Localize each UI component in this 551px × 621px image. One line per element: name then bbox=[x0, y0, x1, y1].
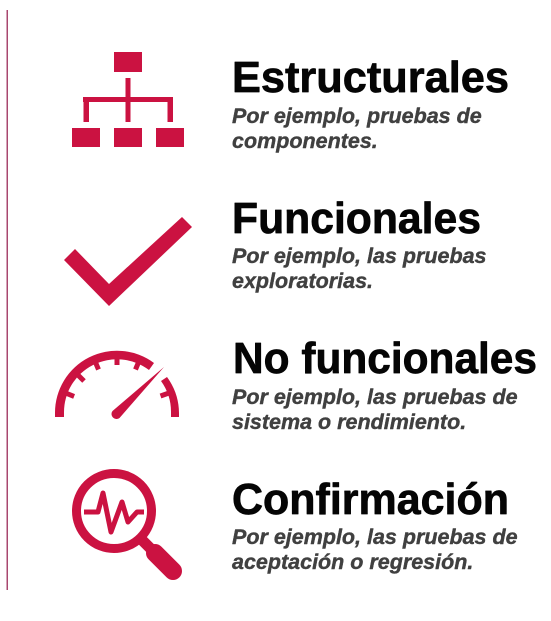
text: Funcionales example: exploratorias. bbox=[232, 269, 373, 293]
text: No funcionales example: Por ejemplo, las pruebas de bbox=[232, 385, 518, 409]
heading: Estructurales: Estructurales bbox=[232, 54, 509, 102]
vertical rule bbox=[6, 10, 8, 590]
heading: Funcionales: Funcionales bbox=[232, 195, 481, 243]
icon: magnifier with pulse bbox=[76, 474, 173, 571]
heading: No funcionales: No funcionales bbox=[233, 335, 537, 383]
text: Funcionales example: Por ejemplo, las pruebas bbox=[232, 244, 487, 268]
heading: Confirmación: Confirmación bbox=[232, 476, 509, 524]
text: No funcionales example: sistema o rendimiento. bbox=[232, 410, 466, 434]
icon: speedometer bbox=[55, 351, 179, 419]
text: Confirmación example: Por ejemplo, las pruebas de bbox=[232, 525, 518, 549]
text: Estructurales example: Por ejemplo, pruebas de bbox=[232, 104, 482, 128]
text: Estructurales example: componentes. bbox=[232, 129, 378, 153]
text: Confirmación example: aceptación o regresión. bbox=[232, 550, 473, 574]
icon: check mark bbox=[64, 217, 192, 306]
icon: hierarchy bbox=[72, 52, 184, 147]
